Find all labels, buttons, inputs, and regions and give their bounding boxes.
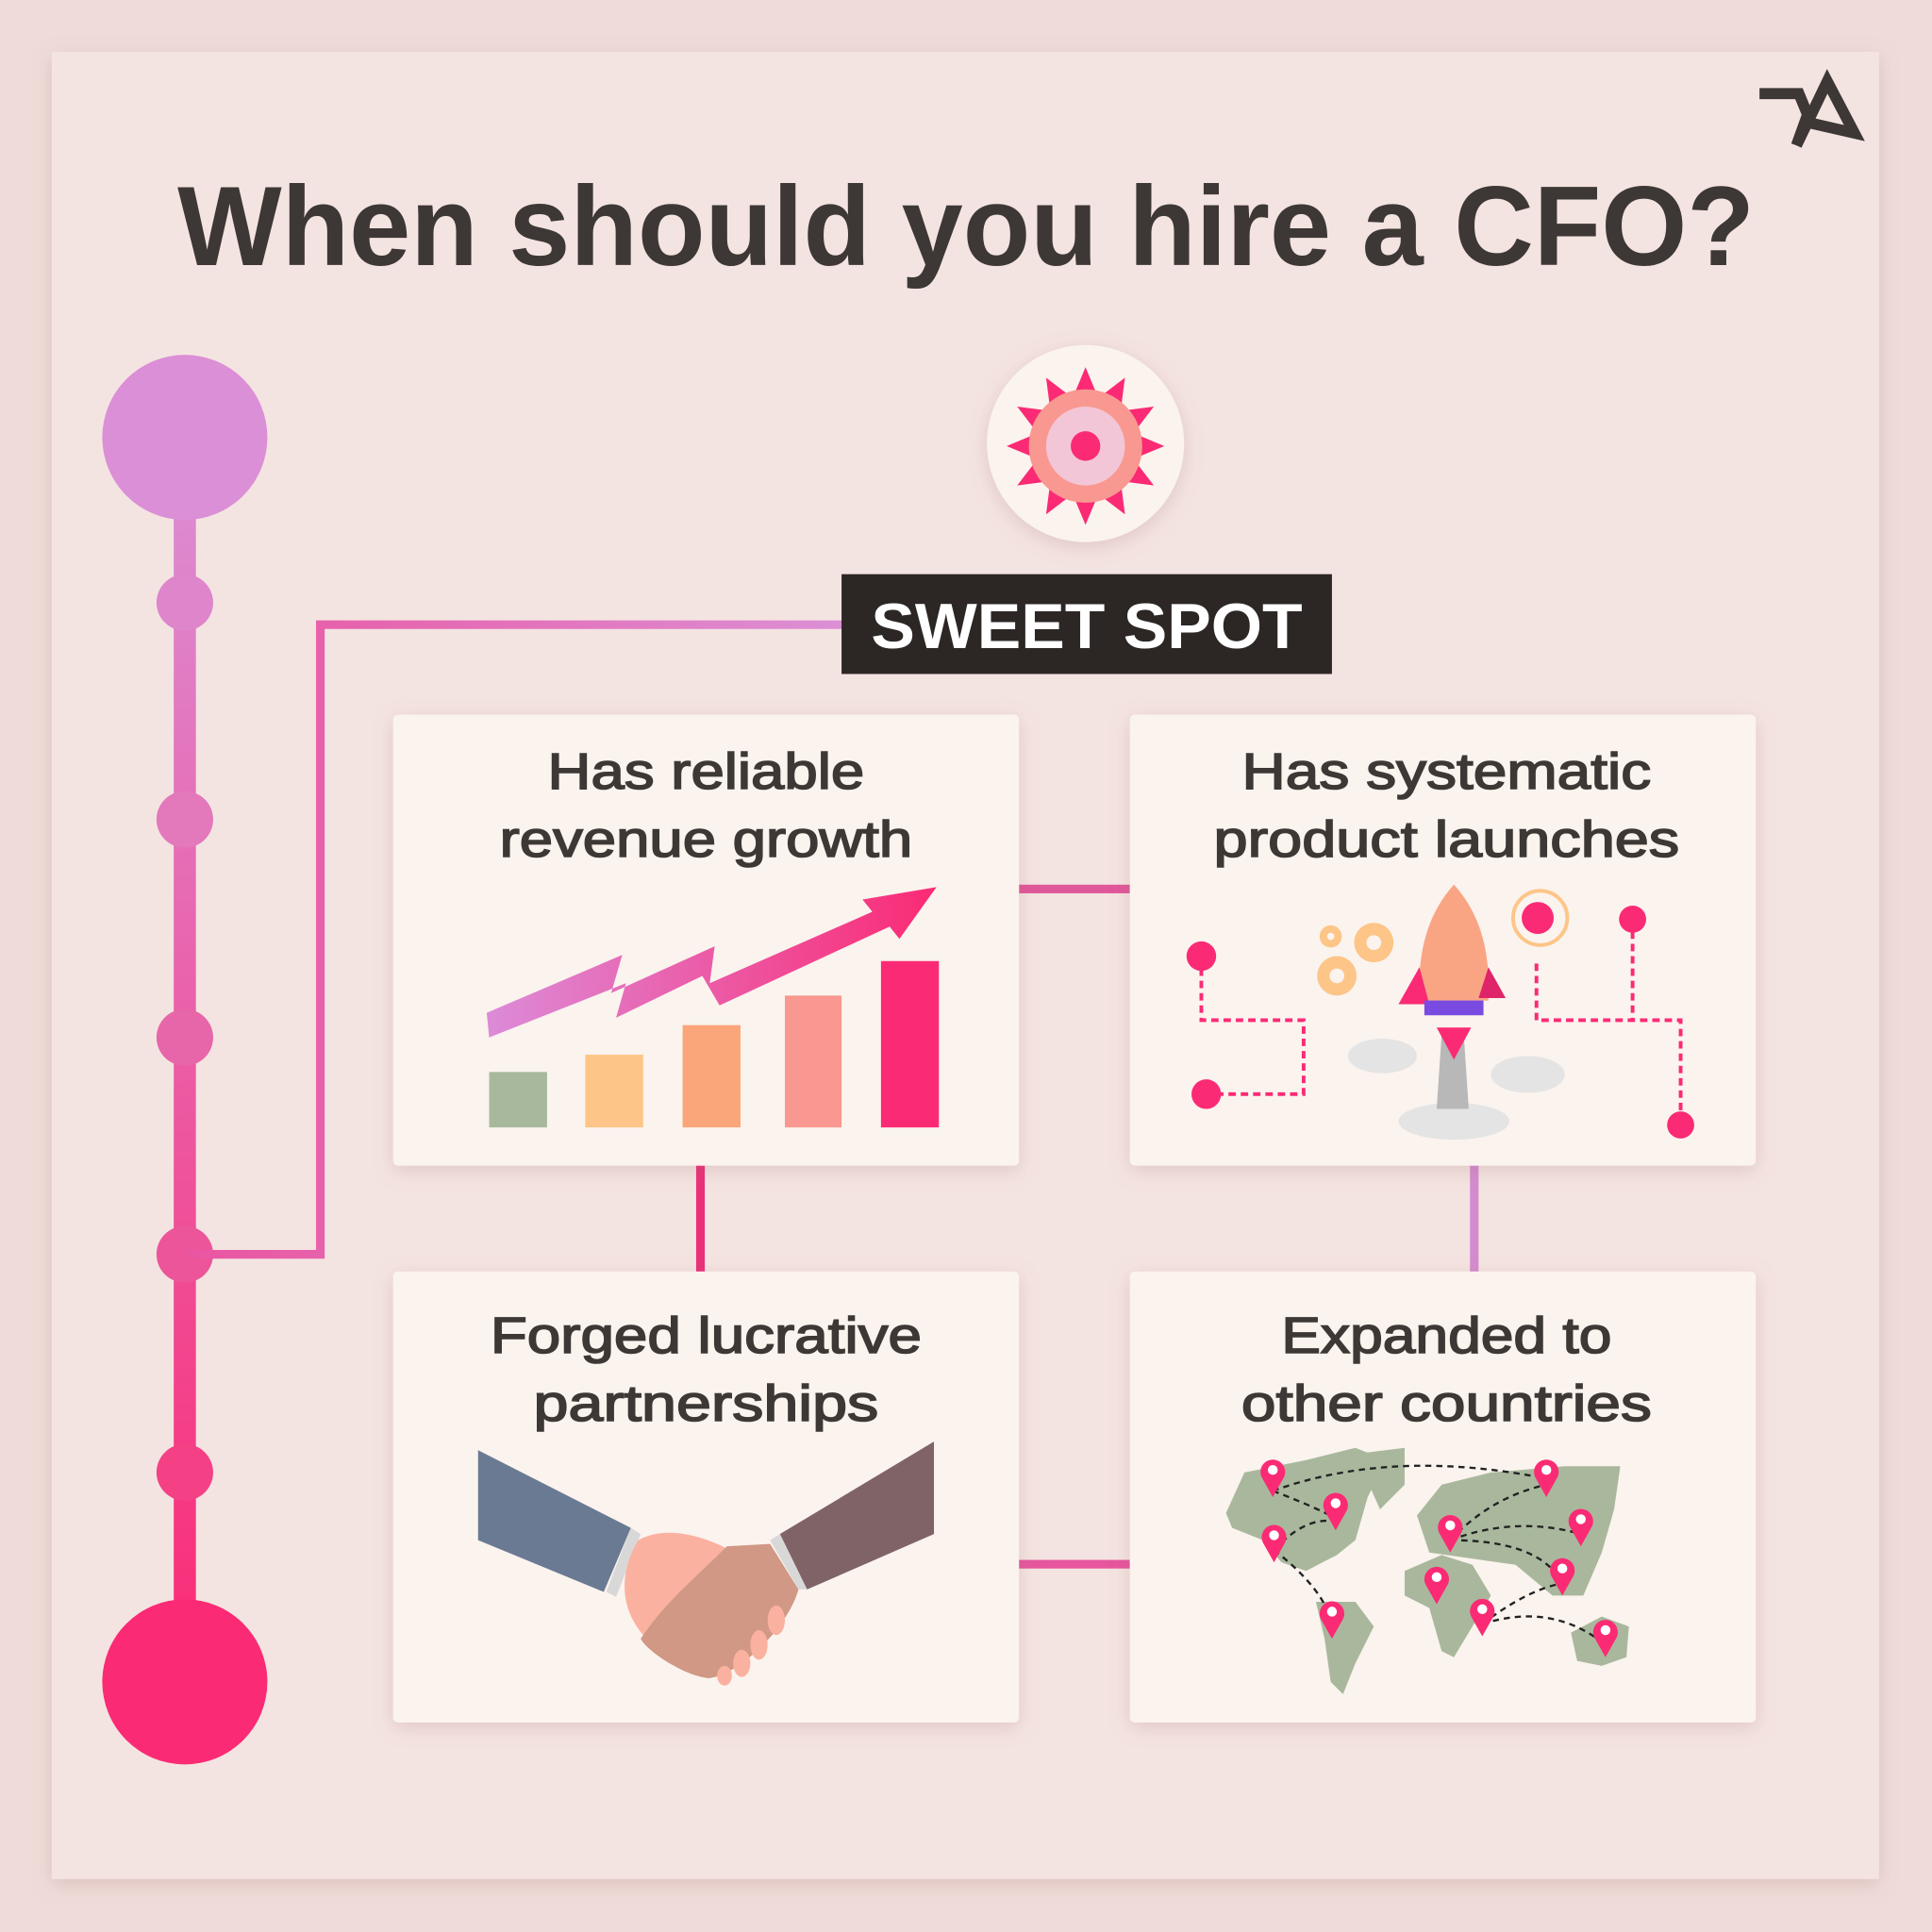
logo	[1759, 81, 1855, 145]
panel: countries: other countries	[1241, 1376, 1652, 1432]
title: When should you hire a CFO?	[177, 163, 1755, 290]
panel: revenue growth: revenue growth	[500, 812, 912, 868]
connector to sweet spot	[185, 625, 850, 1255]
panel: partnerships: Forged lucrative	[491, 1308, 922, 1364]
panel: countries	[1130, 1272, 1756, 1723]
panel: product launches: Has systematic	[1242, 744, 1651, 800]
panel: countries: Expanded to	[1281, 1308, 1611, 1364]
sweet spot label	[841, 575, 1332, 674]
connectors between cards	[696, 885, 1478, 1569]
icon: handshake	[478, 1441, 934, 1686]
icon: rocket	[1187, 885, 1694, 1140]
panel: product launches	[1130, 715, 1756, 1166]
icon: world map	[1226, 1448, 1629, 1694]
timeline	[102, 355, 267, 1764]
panel: revenue growth: Has reliable	[548, 744, 864, 800]
icon: flower	[987, 345, 1184, 542]
panel: product launches: product launches	[1214, 812, 1679, 868]
sweet spot label: SWEET SPOT	[871, 591, 1303, 662]
panel: partnerships	[393, 1272, 1019, 1723]
bar chart	[487, 887, 939, 1127]
panel: partnerships: partnerships	[534, 1376, 878, 1432]
panel: revenue growth	[393, 715, 1019, 1166]
